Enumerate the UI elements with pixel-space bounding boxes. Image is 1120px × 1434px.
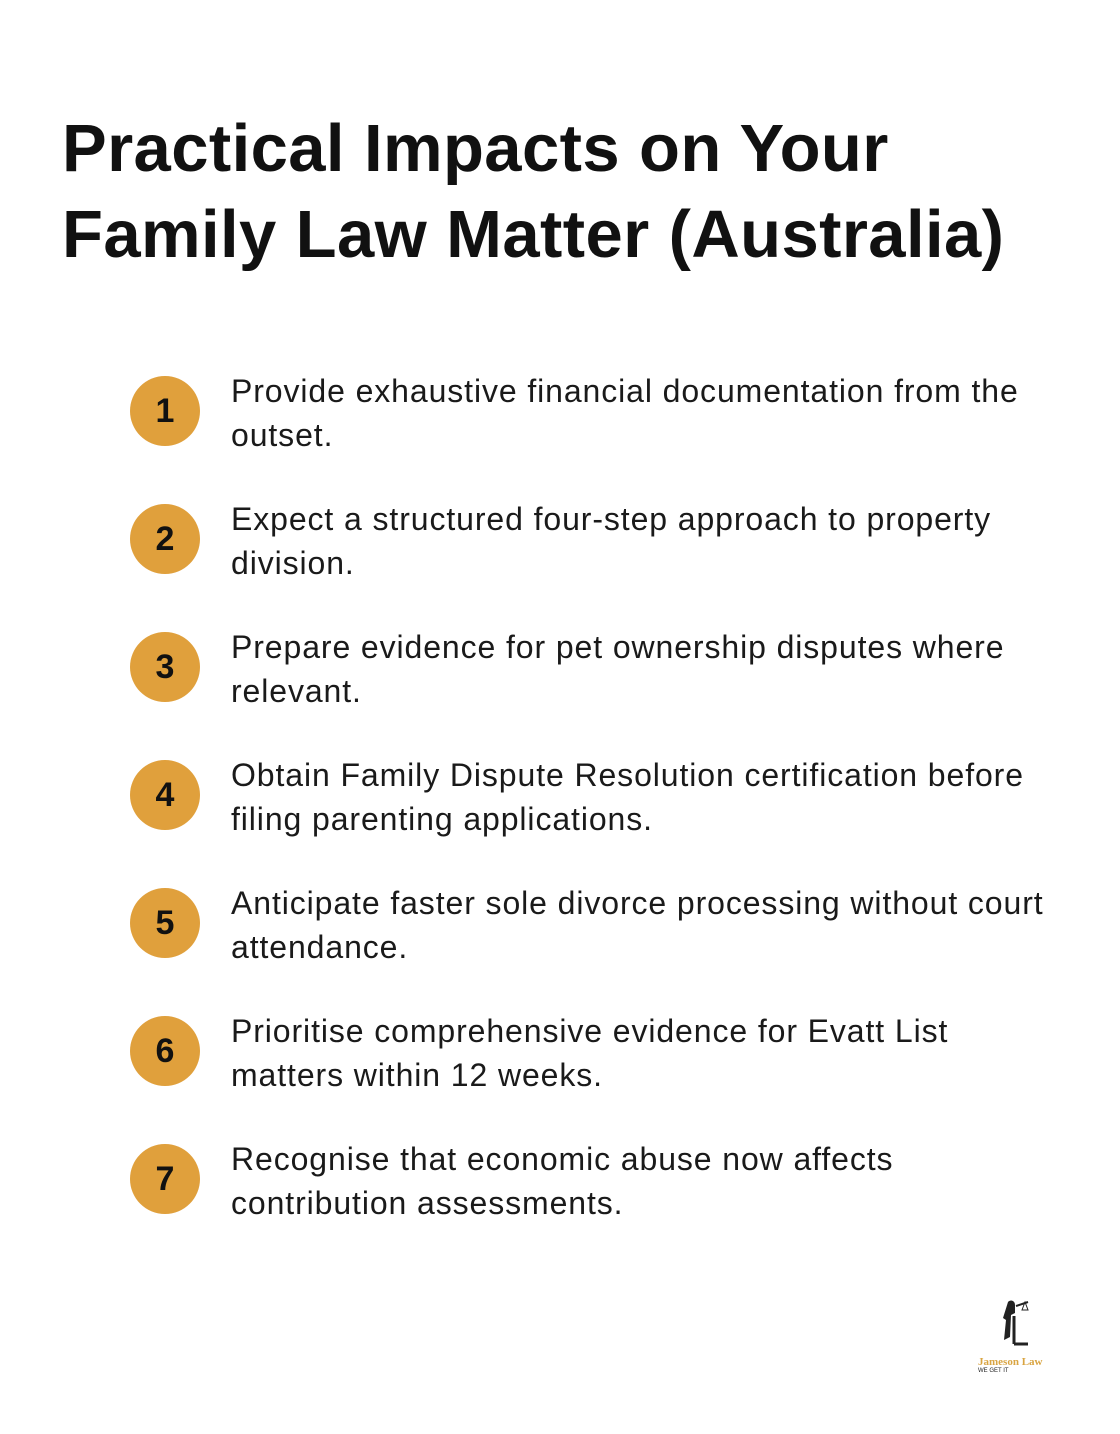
item 2: Expect a structured four-step approach to property <box>231 501 991 537</box>
item 5: attendance. <box>231 929 408 965</box>
item 1: Provide exhaustive financial documentation from the <box>231 373 1019 409</box>
item 5 <box>130 885 1044 965</box>
item 4: filing parenting applications. <box>231 801 653 837</box>
item 5: Anticipate faster sole divorce processing without court <box>231 885 1044 921</box>
item 6: Prioritise comprehensive evidence for Evatt List <box>231 1013 948 1049</box>
item 3 <box>130 629 1004 709</box>
item 4: 4 <box>156 776 174 814</box>
logo <box>978 1300 1042 1374</box>
item 4: Obtain Family Dispute Resolution certification before <box>231 757 1024 793</box>
title <box>62 111 1004 272</box>
item 2: 2 <box>156 520 174 558</box>
item 3: Prepare evidence for pet ownership disputes where <box>231 629 1004 665</box>
title: Practical Impacts on Your <box>62 111 889 186</box>
item 6: matters within 12 weeks. <box>231 1057 603 1093</box>
item 3: relevant. <box>231 673 362 709</box>
item 1: 1 <box>156 392 174 430</box>
item 1: outset. <box>231 417 333 453</box>
item 2 <box>130 501 991 581</box>
item 2: division. <box>231 545 355 581</box>
title: Family Law Matter (Australia) <box>62 197 1004 272</box>
item 7: contribution assessments. <box>231 1185 623 1221</box>
item 7 <box>130 1141 893 1221</box>
item 7: Recognise that economic abuse now affects <box>231 1141 893 1177</box>
item 1 <box>130 373 1019 453</box>
logo: WE GET IT <box>978 1368 1009 1374</box>
item 7: 7 <box>156 1160 174 1198</box>
logo: Jameson Law <box>978 1356 1042 1368</box>
item 4 <box>130 757 1024 837</box>
item 6: 6 <box>156 1032 174 1070</box>
item 5: 5 <box>156 904 174 942</box>
item 3: 3 <box>156 648 174 686</box>
item 6 <box>130 1013 948 1093</box>
